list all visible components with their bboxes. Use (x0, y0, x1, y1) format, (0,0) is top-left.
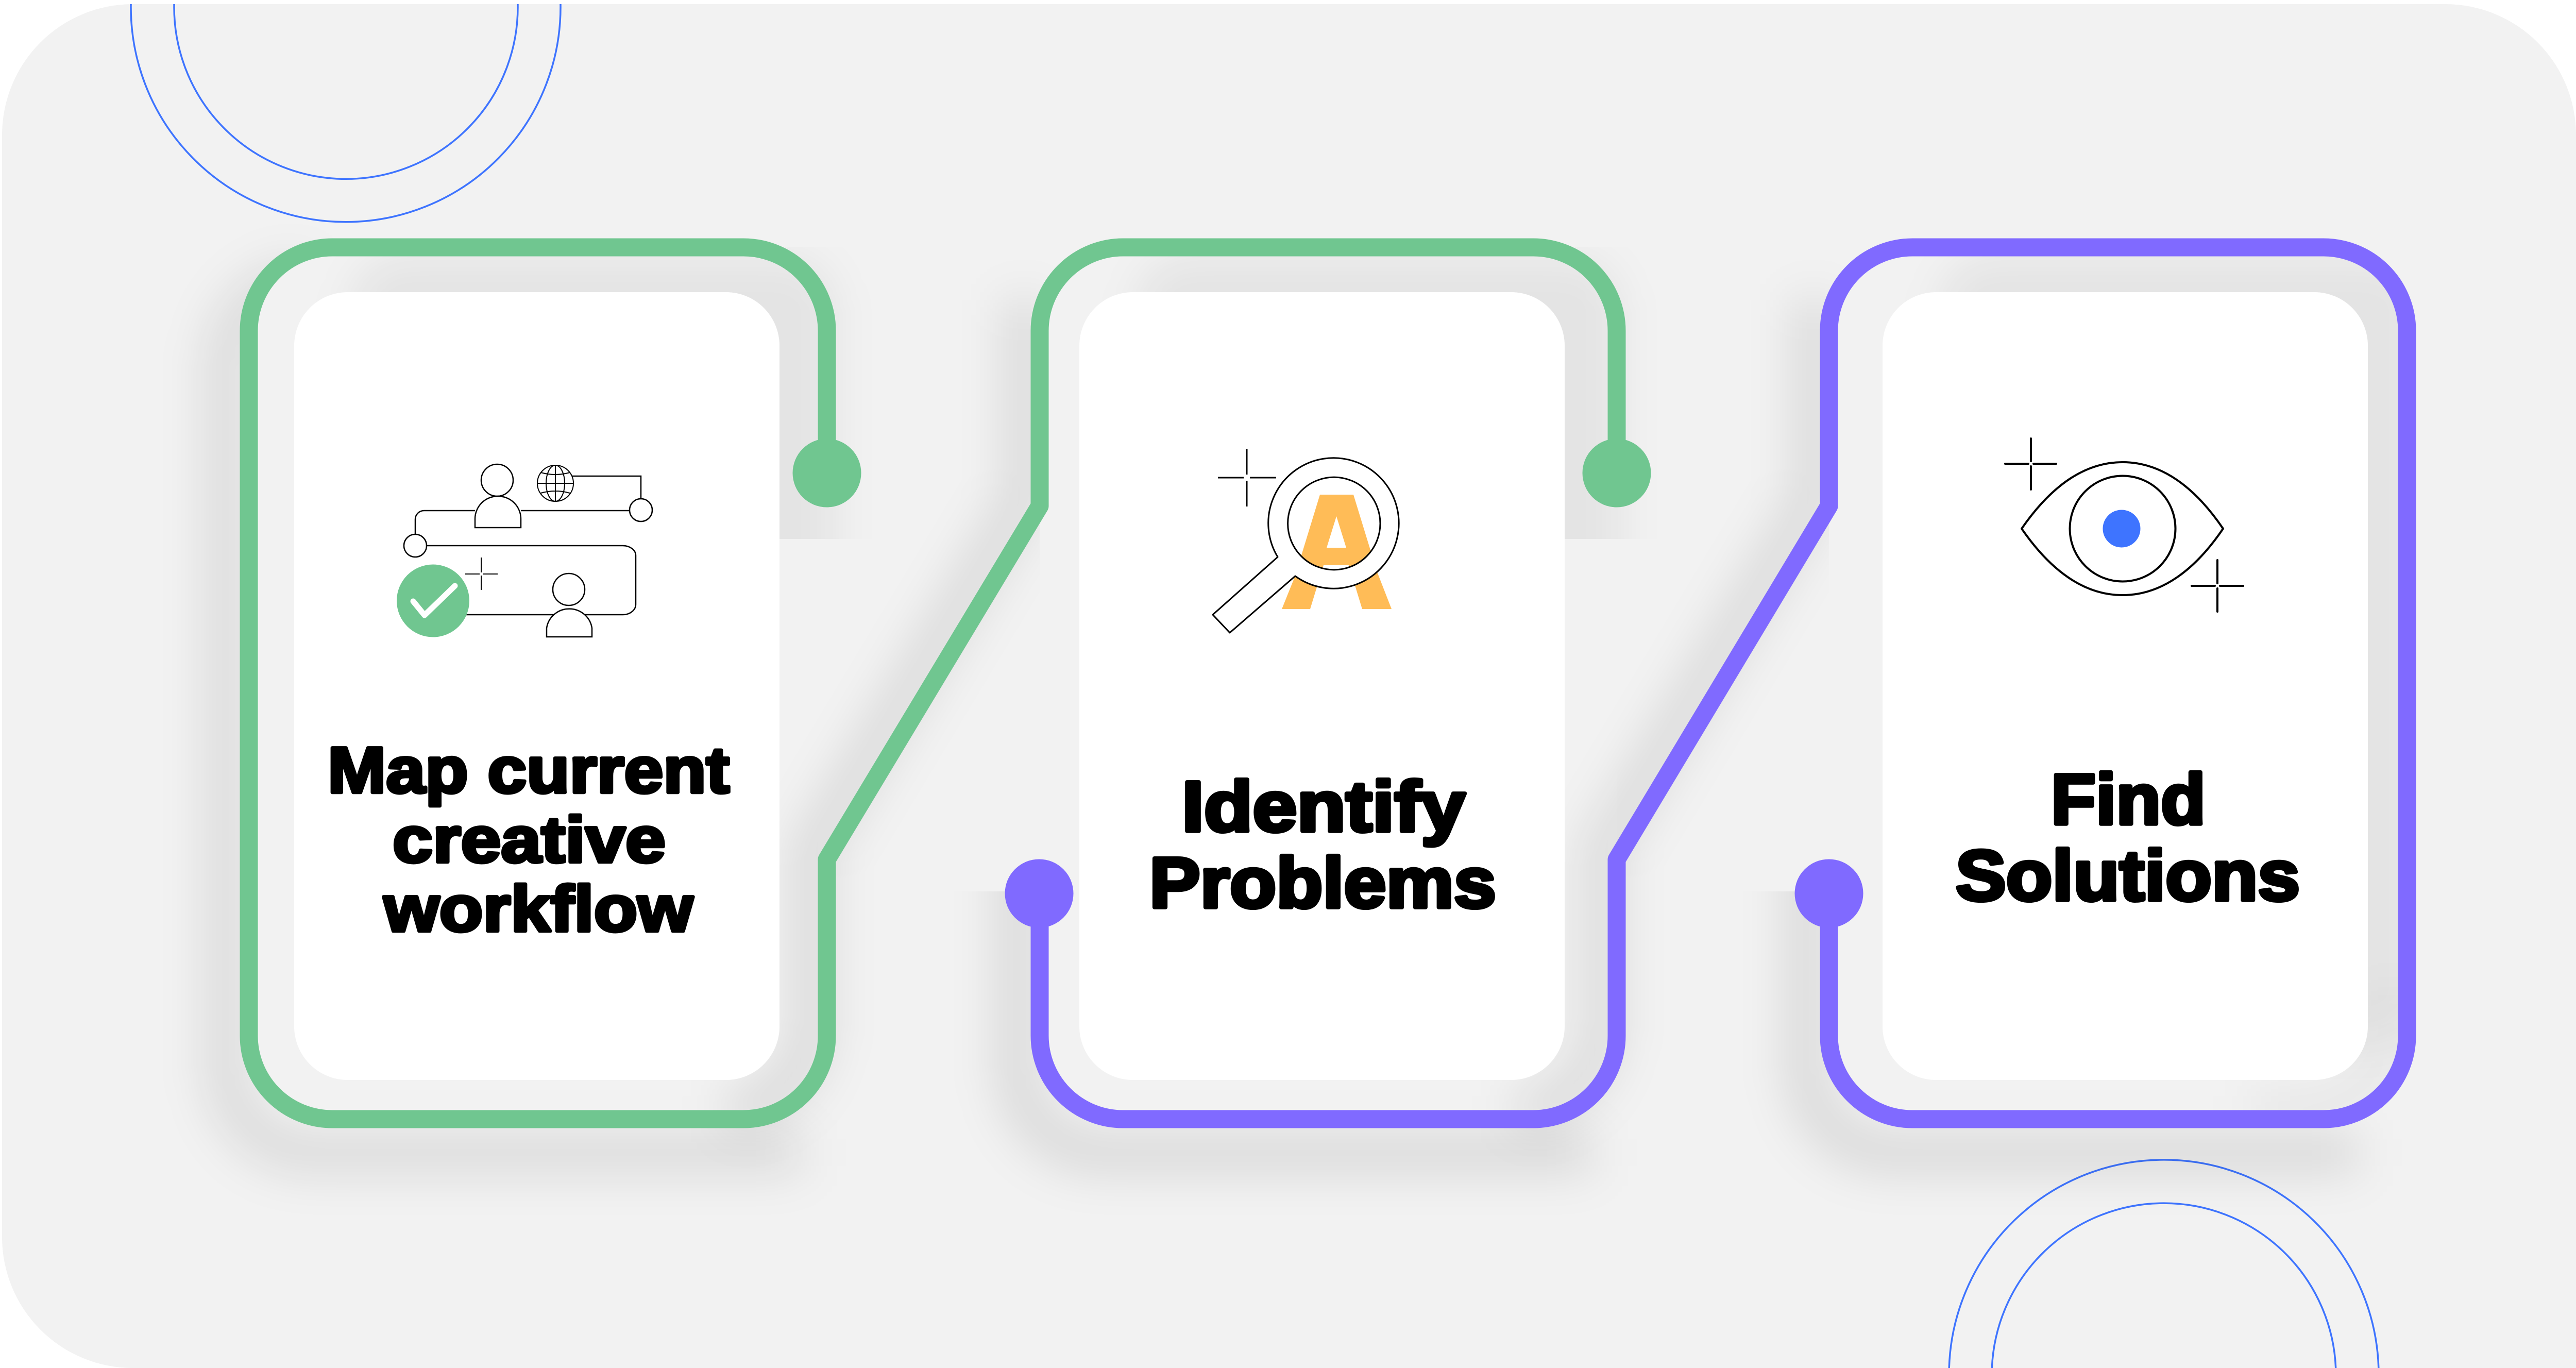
heading: Map current creative workflow (328, 734, 730, 945)
decorative rings top left (131, 4, 561, 222)
heading: Map current creative workflow: Map current (328, 734, 730, 806)
decorative rings bottom right (1949, 1160, 2379, 1368)
icon: eye with sparkles (2005, 438, 2243, 612)
heading: Find Solutions: Find (2051, 760, 2206, 839)
heading: Identify Problems (1149, 767, 1496, 923)
panel: step 3 find solutions (1883, 292, 2368, 1080)
card surface (1079, 292, 1565, 1080)
heading: Map current creative workflow: creative (393, 803, 666, 876)
heading: Find Solutions (1956, 760, 2300, 916)
card surface (294, 292, 779, 1080)
connector: green path linking steps 1 and 2 (249, 247, 1651, 1119)
heading: Find Solutions: Solutions (1956, 836, 2300, 916)
card surface (1883, 292, 2368, 1080)
panel: step 2 identify problems (1079, 292, 1565, 1080)
connector: purple path linking steps 2 and 3 (1005, 247, 2407, 1119)
panel: step 1 map workflow (294, 292, 779, 1080)
heading: Map current creative workflow: workflow (383, 872, 693, 945)
heading: Identify Problems: Identify (1182, 767, 1465, 847)
icon: magnifying glass over letter A (1213, 449, 1399, 633)
heading: Identify Problems: Problems (1149, 843, 1496, 923)
icon: workflow with people and globe (397, 464, 652, 637)
